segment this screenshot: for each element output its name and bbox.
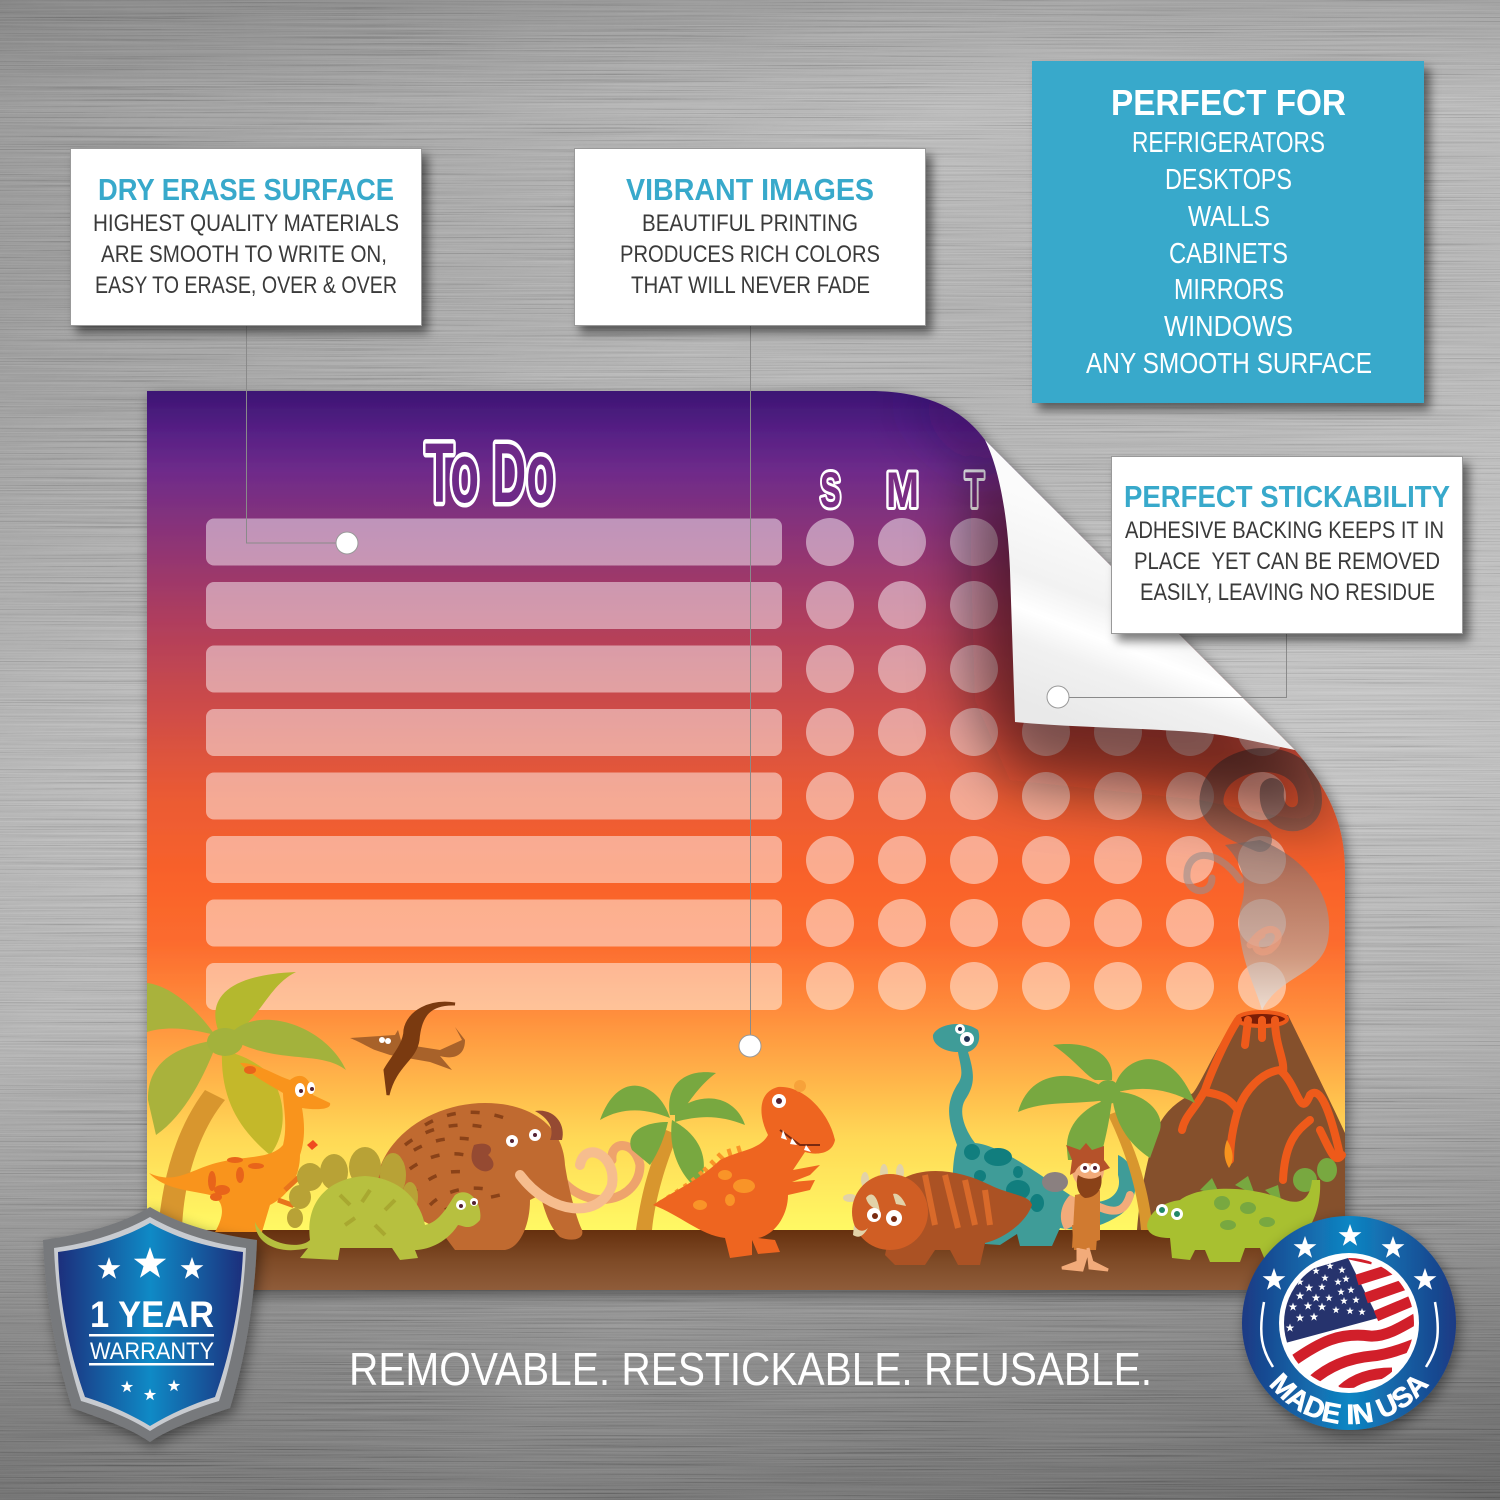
callout body (1125, 517, 1444, 606)
day circles (806, 518, 1286, 1010)
illustration: pterodactyl (350, 1003, 465, 1095)
callout body: PRODUCES RICH COLORS (620, 241, 880, 268)
illustration: triceratops (843, 1164, 1032, 1265)
surface list (1086, 127, 1372, 380)
callout body: PLACE YET CAN BE REMOVED (1134, 548, 1440, 575)
connector: perfect stickability (1047, 633, 1286, 708)
surface list: ANY SMOOTH SURFACE (1086, 348, 1372, 380)
american flag (1284, 1258, 1414, 1388)
badge stars (1263, 1224, 1436, 1290)
weekday letters: T (965, 462, 984, 518)
callout body: EASILY, LEAVING NO RESIDUE (1140, 579, 1435, 606)
illustration: brontosaurus (933, 1024, 1136, 1246)
badge text: MADE IN USA (1269, 1372, 1430, 1424)
weekday letters (820, 462, 984, 518)
panel: perfect for (1032, 61, 1424, 403)
callout: perfect stickability (1112, 456, 1462, 634)
surface list: REFRIGERATORS (1132, 127, 1325, 159)
callout body: THAT WILL NEVER FADE (631, 272, 870, 299)
callout heading: PERFECT STICKABILITY (1124, 479, 1450, 514)
weekday letters: S (820, 462, 841, 518)
to do heading: To Do (425, 426, 555, 520)
surface list: WALLS (1188, 201, 1270, 233)
illustration: caveman (1042, 1143, 1130, 1270)
callout body: ARE SMOOTH TO WRITE ON, (101, 241, 387, 268)
shield stars top (98, 1247, 203, 1279)
illustration: t-rex (653, 1080, 835, 1258)
connector: dry erase surface (246, 325, 358, 554)
callout: dry erase surface (70, 148, 422, 326)
callout heading: VIBRANT IMAGES (626, 172, 874, 207)
surface list: MIRRORS (1174, 274, 1284, 306)
callout body (93, 210, 399, 299)
callout body: HIGHEST QUALITY MATERIALS (93, 210, 399, 237)
sheet background gradient (147, 391, 1345, 1290)
surface list: DESKTOPS (1165, 164, 1292, 196)
surface list: CABINETS (1169, 238, 1288, 270)
badge: 1 year warranty shield: WARRANTY (90, 1338, 214, 1365)
tagline: REMOVABLE. RESTICKABLE. REUSABLE. (349, 1343, 1152, 1395)
illustration: stegosaurus (255, 1147, 480, 1260)
callout: vibrant images (574, 148, 926, 326)
illustration: mammoth (375, 1103, 640, 1250)
illustration: left palm tree (147, 972, 346, 1232)
peeled corner flap (985, 440, 1295, 750)
illustration: orange hadrosaur (149, 1063, 330, 1232)
sticker sheet (147, 391, 1345, 1290)
to do rows (206, 518, 782, 1010)
volcano smoke (1187, 760, 1329, 1010)
shield stars bottom (121, 1380, 180, 1400)
callout body: BEAUTIFUL PRINTING (642, 210, 858, 237)
callout body (620, 210, 880, 299)
surface list: WINDOWS (1164, 311, 1293, 343)
panel heading: PERFECT FOR (1111, 82, 1346, 123)
illustration: volcano (1137, 1012, 1345, 1230)
illustration: right palm tree (1018, 1044, 1195, 1230)
curl shadow on sheet (900, 395, 1345, 830)
callout heading: DRY ERASE SURFACE (98, 172, 394, 207)
ground strip (147, 1230, 1345, 1290)
badge: 1 year warranty shield (43, 1207, 257, 1442)
warranty text: 1 YEAR (90, 1294, 214, 1335)
weekday letters: M (886, 462, 919, 518)
connector: vibrant images (739, 325, 761, 1057)
illustration: middle palm tree (600, 1072, 745, 1230)
callout body: ADHESIVE BACKING KEEPS IT IN (1125, 517, 1444, 544)
badge side arcs (1261, 1302, 1438, 1367)
callout body: EASY TO ERASE, OVER & OVER (95, 272, 397, 299)
illustration: green ankylosaur (1147, 1158, 1337, 1262)
badge: made in usa (1238, 1214, 1466, 1442)
